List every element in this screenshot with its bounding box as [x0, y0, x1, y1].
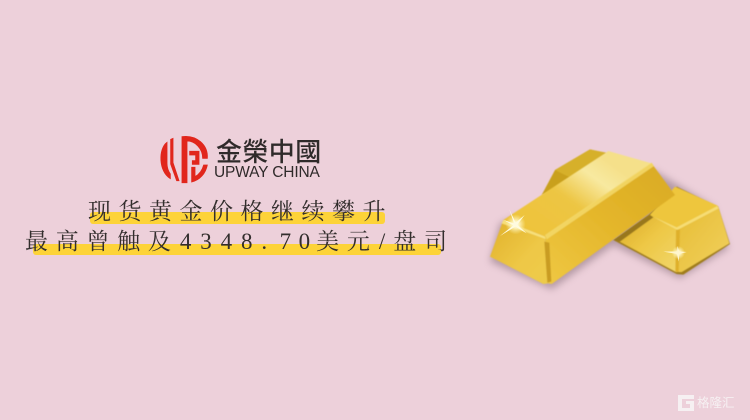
logo english wordmark: UPWAY CHINA	[214, 164, 320, 181]
watermark text: 格隆汇	[697, 396, 735, 410]
back left gold bar	[542, 149, 607, 195]
illustration: gold bars	[488, 148, 731, 292]
headline	[25, 199, 455, 255]
highlight: line one	[90, 212, 385, 224]
sparkle: front bar	[500, 209, 527, 236]
headline line one: 现货黄金价格继续攀升	[88, 199, 393, 224]
watermark: gelonghui	[678, 395, 735, 411]
highlight: line two	[33, 244, 441, 255]
watermark icon	[678, 395, 694, 411]
front gold bar	[490, 151, 675, 284]
headline line two: 最高曾触及4348.70美元/盘司	[25, 229, 455, 254]
bar shadow	[490, 170, 728, 289]
logo emblem	[160, 136, 208, 184]
logo chinese wordmark: 金榮中國	[216, 137, 322, 167]
back right gold bar	[613, 187, 730, 275]
logo: upway china	[160, 136, 322, 184]
sparkle: right bar	[663, 246, 687, 262]
